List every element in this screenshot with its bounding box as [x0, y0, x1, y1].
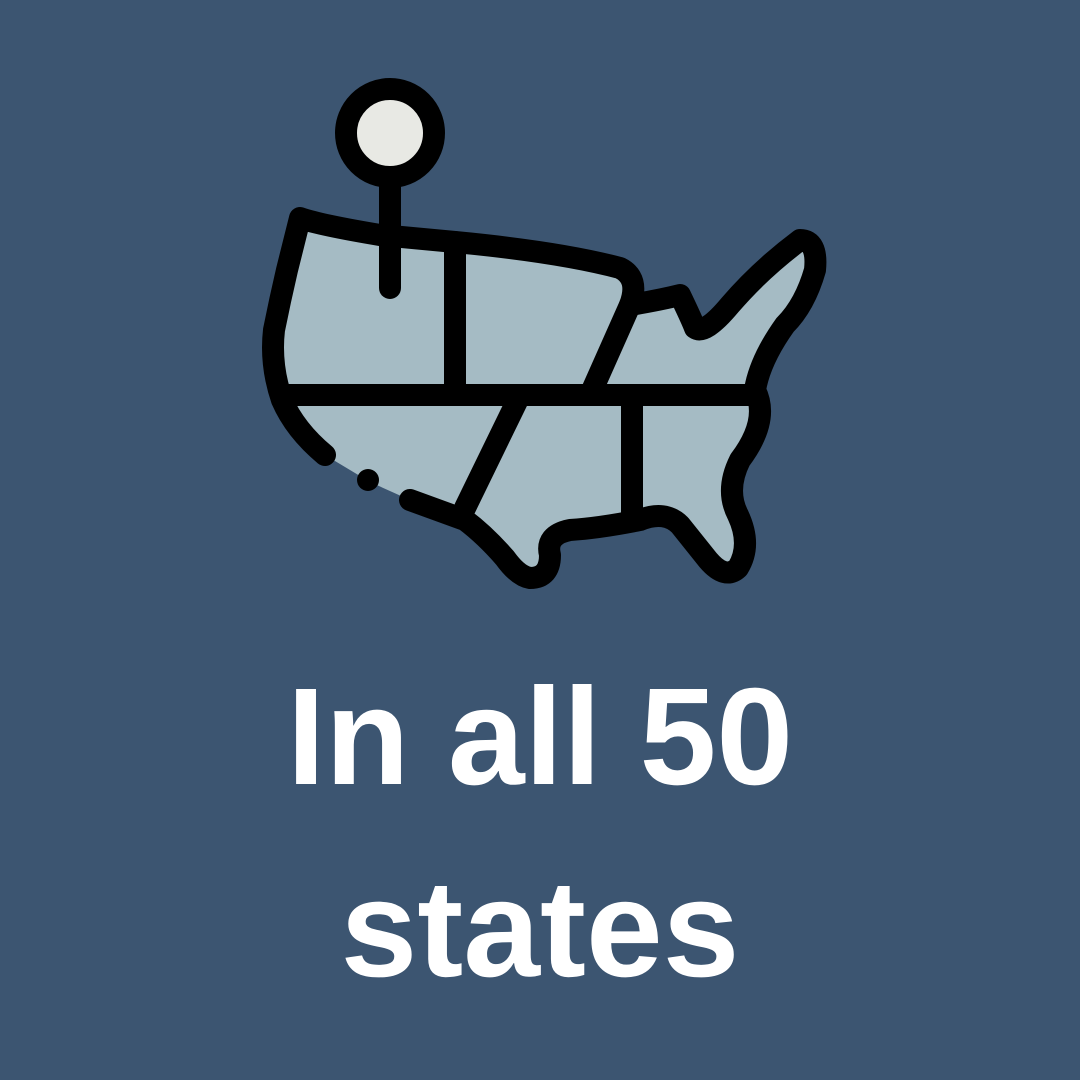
- title line 1: In all 50: [287, 660, 793, 814]
- title line 2: states: [341, 852, 739, 1006]
- pin: [379, 180, 401, 288]
